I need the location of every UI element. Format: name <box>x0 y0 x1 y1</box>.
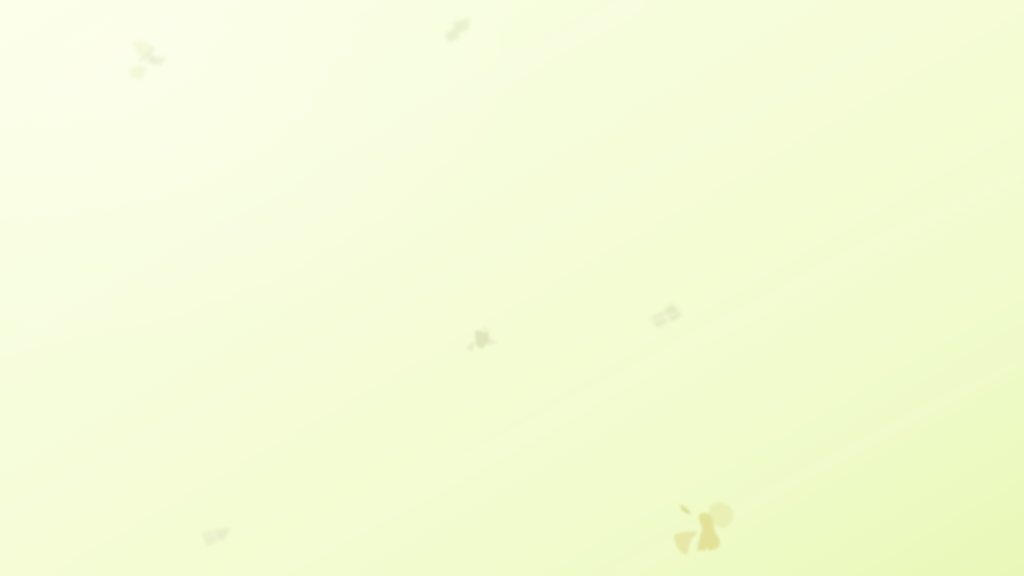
icon: leaf cluster, right centre <box>651 304 682 328</box>
icon: central leaf <box>697 513 720 551</box>
icon: leaf cluster, centre <box>466 326 498 352</box>
icon: small falling petal <box>680 505 691 514</box>
icon: leaf cluster, bottom left <box>202 528 230 546</box>
icon: right pale leaf <box>709 502 733 528</box>
icon: pale leaf cluster, top centre <box>445 18 471 43</box>
icon: large ginkgo leaf cluster, bottom right <box>674 502 733 555</box>
icon: pale leaf cluster, top left <box>128 41 167 80</box>
icon: left leaf <box>674 531 698 555</box>
